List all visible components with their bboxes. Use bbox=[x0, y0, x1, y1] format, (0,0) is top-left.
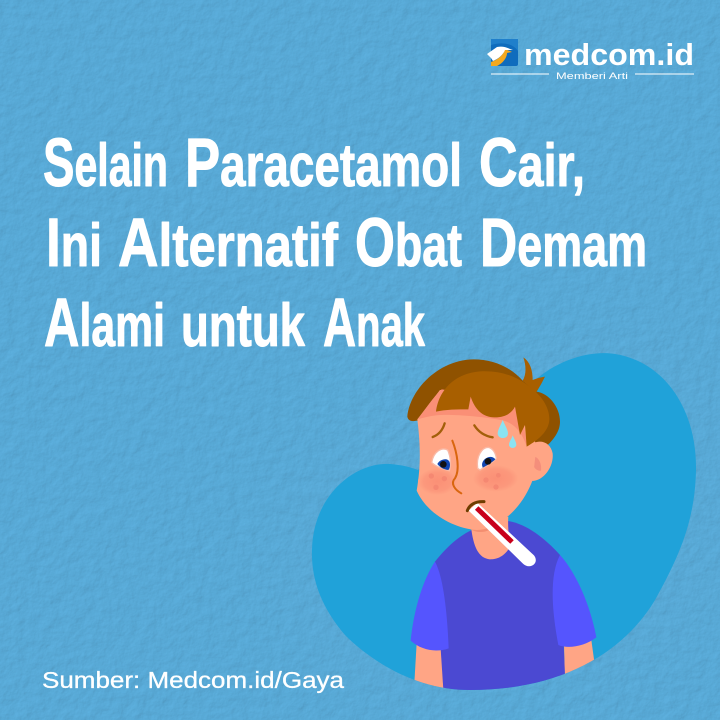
boy body: arms, shirt and sleeves bbox=[411, 517, 596, 700]
hair front bbox=[436, 371, 549, 447]
shirt bbox=[435, 521, 566, 700]
mouth bbox=[467, 502, 484, 511]
hair cowlick bbox=[523, 357, 545, 393]
boy head bbox=[407, 357, 560, 566]
hair back bbox=[407, 359, 560, 447]
title: Demam bbox=[480, 204, 647, 281]
title: Obat bbox=[355, 204, 462, 281]
tagline: Memberi Arti bbox=[556, 71, 628, 82]
illustration: sick boy bbox=[407, 357, 596, 700]
left arm bbox=[414, 645, 445, 688]
title: Paracetamol bbox=[185, 124, 462, 201]
title: Cair, bbox=[479, 124, 585, 201]
sweat drops bbox=[498, 420, 508, 438]
freckles bbox=[429, 473, 501, 490]
left sleeve bbox=[411, 562, 449, 650]
nose line bbox=[452, 441, 461, 493]
face bbox=[417, 390, 537, 530]
title bbox=[43, 124, 647, 361]
title: Anak bbox=[323, 284, 425, 361]
title: Alami bbox=[44, 284, 165, 361]
neck bbox=[471, 517, 510, 559]
icon: eagle logo mark bbox=[487, 39, 518, 66]
thermometer bbox=[469, 503, 536, 566]
left eye bbox=[432, 449, 450, 471]
title: untuk bbox=[181, 292, 305, 359]
right sleeve bbox=[553, 555, 596, 647]
cheek blush bbox=[418, 468, 457, 495]
title: Alternatif bbox=[118, 204, 339, 281]
neck shadow bbox=[469, 517, 497, 532]
logo: medcom.id bbox=[487, 37, 694, 82]
source line: Sumber: Medcom.id/Gaya bbox=[42, 667, 344, 693]
eyebrows bbox=[433, 423, 445, 437]
wordmark: medcom.id bbox=[524, 37, 694, 72]
forehead shadow bbox=[417, 389, 527, 447]
right arm bbox=[564, 640, 594, 674]
decorative blue blob bbox=[312, 353, 696, 690]
ear bbox=[528, 442, 553, 481]
title: Selain bbox=[43, 124, 168, 201]
title: Ini bbox=[46, 204, 102, 281]
right eye bbox=[477, 447, 496, 470]
